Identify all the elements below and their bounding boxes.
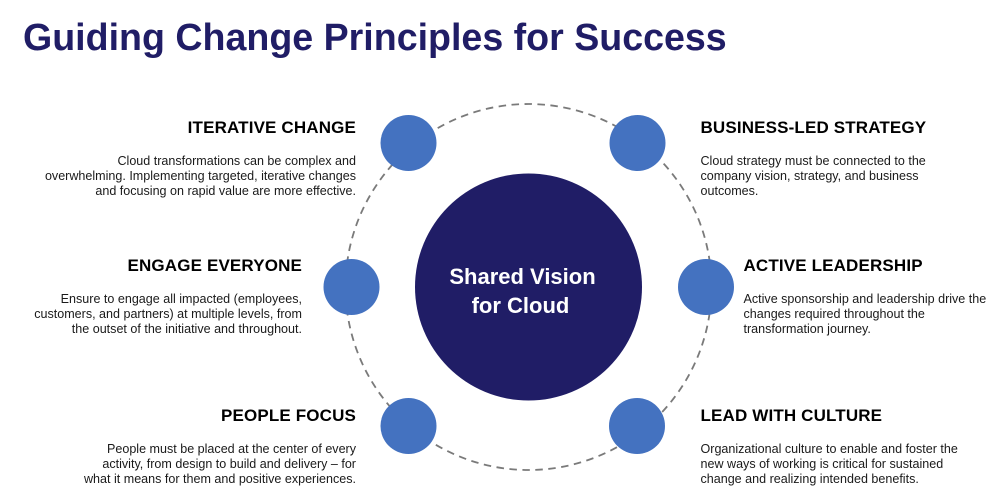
text block: people focus: what it means for them and positive experiences. (84, 472, 356, 486)
text block: active leadership: ACTIVE LEADERSHIP (744, 256, 923, 275)
central circle (415, 174, 642, 400)
node: iterative change (380, 115, 436, 171)
center label: for Cloud (472, 293, 569, 318)
text block: business-led strategy: BUSINESS-LED STRATEGY (700, 118, 926, 137)
text block: business-led strategy: company vision, strategy, and business (700, 169, 919, 183)
text block: engage everyone: ENGAGE EVERYONE (128, 256, 302, 275)
text block: active leadership: changes required throughout the (744, 307, 925, 321)
text block: iterative change: ITERATIVE CHANGE (188, 118, 356, 137)
node: lead with culture (609, 398, 665, 454)
node: active leadership (678, 259, 734, 315)
text block: lead with culture (700, 406, 958, 486)
title: Guiding Change Principles for Success (23, 16, 727, 58)
text block: engage everyone: customers, and partners) at multiple levels, from (34, 307, 302, 321)
node: business-led strategy (610, 115, 666, 171)
text block: engage everyone (34, 256, 302, 336)
text block: lead with culture: Organizational culture to enable and foster the (700, 442, 958, 456)
node: engage everyone (324, 259, 380, 315)
center label: Shared Vision (449, 264, 596, 289)
center label (449, 264, 596, 318)
text block: active leadership: transformation journey. (744, 322, 871, 336)
text block: active leadership (744, 256, 986, 336)
text block: business-led strategy: Cloud strategy must be connected to the (700, 154, 926, 168)
text block: active leadership: Active sponsorship and leadership drive the (744, 292, 986, 306)
text block: business-led strategy: outcomes. (700, 184, 758, 198)
dashed ring (346, 104, 712, 470)
text block: lead with culture: LEAD WITH CULTURE (700, 406, 882, 425)
text block: people focus (84, 406, 356, 486)
text block: engage everyone: the outset of the initiative and throughout. (72, 322, 302, 336)
text block: people focus: activity, from design to build and delivery – for (102, 457, 356, 471)
text block: lead with culture: change and realizing intended benefits. (700, 472, 919, 486)
text block: iterative change: Cloud transformations can be complex and (117, 154, 356, 168)
text block: engage everyone: Ensure to engage all impacted (employees, (61, 292, 302, 306)
text block: iterative change (45, 118, 356, 198)
text block: business-led strategy (700, 118, 926, 198)
text block: people focus: PEOPLE FOCUS (221, 406, 356, 425)
text block: people focus: People must be placed at the center of every (107, 442, 356, 456)
text block: iterative change: overwhelming. Implementing targeted, iterative changes (45, 169, 356, 183)
node: people focus (380, 398, 436, 454)
text block: lead with culture: new ways of working is critical for sustained (700, 457, 943, 471)
text block: iterative change: and focusing on rapid value are more effective. (95, 184, 356, 198)
